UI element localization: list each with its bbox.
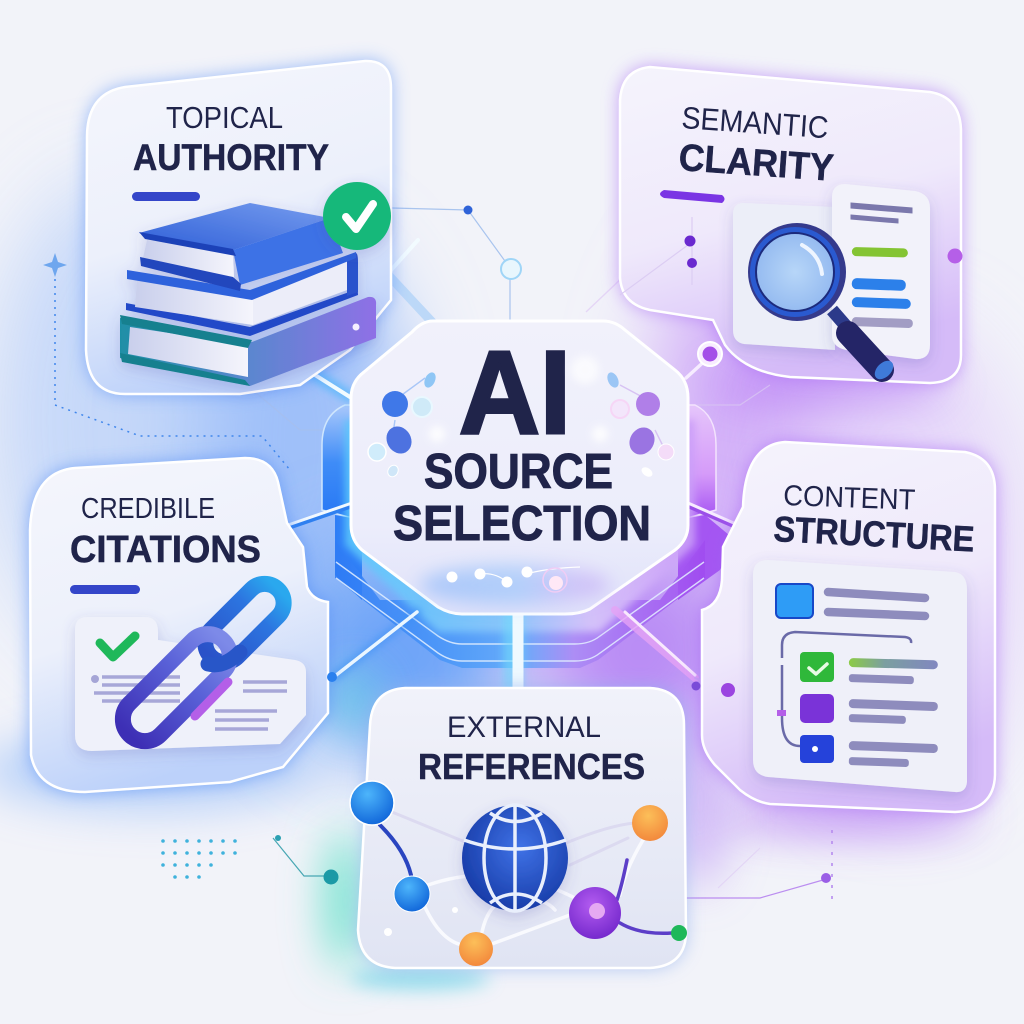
node: purple connector <box>698 342 722 366</box>
panel: credible citations <box>30 458 337 792</box>
panel body <box>358 688 686 968</box>
dots bottom <box>446 566 580 592</box>
subheading: CITATIONS <box>70 529 261 571</box>
inner card <box>753 560 967 792</box>
icon: check badge <box>323 182 391 250</box>
dot grid <box>161 839 237 879</box>
icon: magnifier <box>748 223 897 383</box>
panel: content structure <box>692 442 995 812</box>
document back <box>733 203 835 350</box>
panel: external references <box>350 688 687 968</box>
connector dot <box>692 682 735 697</box>
item: purple square <box>777 694 938 724</box>
icon: chain link <box>114 576 292 750</box>
title: AI: AI <box>459 327 571 459</box>
document card <box>75 617 306 751</box>
panel: semantic clarity <box>620 67 962 383</box>
title: selection: SELECTION <box>393 497 651 551</box>
center hub lower layers <box>322 405 735 668</box>
heading: TOPICAL <box>166 100 283 135</box>
accent bar <box>70 585 140 594</box>
subheading: CLARITY <box>677 137 835 190</box>
heading: EXTERNAL <box>447 711 601 744</box>
molecule right <box>571 356 674 479</box>
subheading: STRUCTURE <box>773 508 975 560</box>
connector dot <box>948 248 962 264</box>
subheading: AUTHORITY <box>133 137 329 178</box>
molecule left <box>368 371 445 479</box>
accent bar <box>132 192 200 201</box>
heading: SEMANTIC <box>681 100 830 145</box>
panel: topical authority <box>86 61 391 394</box>
item: green check <box>800 652 938 684</box>
document front <box>832 184 930 359</box>
hub base layers <box>335 540 705 668</box>
panel body <box>620 67 961 383</box>
connector glows <box>288 240 736 692</box>
connector dot <box>327 672 337 682</box>
center hub <box>351 321 688 614</box>
bottom glow <box>420 565 610 605</box>
panel body <box>30 458 328 792</box>
item: blue square <box>776 584 925 618</box>
title: source: SOURCE <box>424 445 613 499</box>
heading: CREDIBILE <box>81 493 215 525</box>
icon: globe <box>462 805 568 911</box>
item: blue dot square <box>800 735 938 767</box>
subheading: REFERENCES <box>418 746 645 787</box>
panel body <box>86 61 391 394</box>
accent bar <box>660 190 724 203</box>
icon: book stack <box>120 203 376 386</box>
dots and line <box>620 217 697 295</box>
tree bracket <box>782 632 911 746</box>
heading: CONTENT <box>783 480 916 517</box>
nodes <box>350 781 687 966</box>
decorative network lines <box>43 206 832 900</box>
panel body <box>702 442 995 812</box>
network lines <box>380 812 672 945</box>
